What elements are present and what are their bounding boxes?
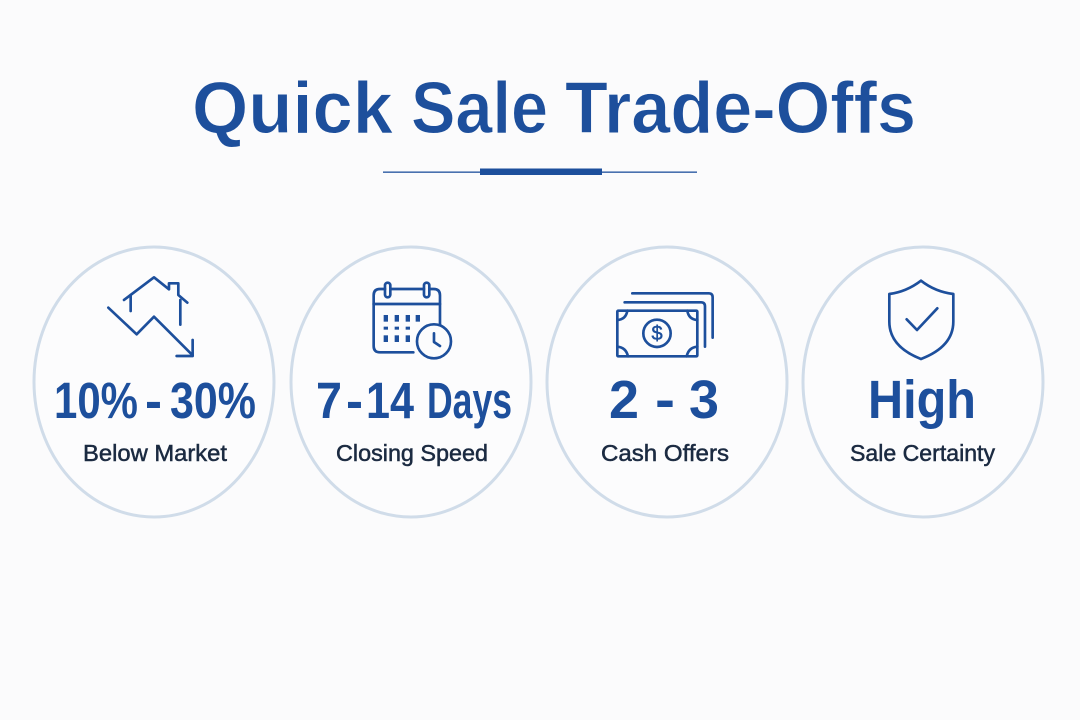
label: Sale Certainty [850, 440, 995, 466]
value: High [868, 370, 976, 430]
value: - [655, 370, 675, 430]
value [54, 372, 256, 429]
label: Closing Speed [336, 440, 488, 466]
panel: sale certainty [803, 247, 1043, 517]
value: 14 [366, 372, 415, 429]
panel: below market [34, 247, 274, 517]
title: Sale [411, 68, 548, 149]
icon: shield with check [889, 281, 953, 359]
value: Days [427, 372, 512, 429]
value: 7 [316, 372, 342, 429]
value: 10% [54, 372, 138, 429]
value: - [145, 372, 162, 429]
panel: closing speed [291, 247, 531, 517]
icon: stack of banknotes [617, 293, 713, 356]
icon: house with falling arrow [108, 277, 193, 356]
label: Cash Offers [601, 440, 729, 466]
value [609, 370, 719, 430]
icon: dollar sign: $ [651, 323, 663, 345]
icon: calendar with clock [374, 283, 451, 358]
value: 30% [170, 372, 256, 429]
value [316, 372, 512, 429]
label: Below Market [83, 440, 228, 466]
circle outline [291, 247, 531, 517]
title [192, 68, 916, 149]
circle outline [803, 247, 1043, 517]
title: Trade-Offs [565, 68, 916, 149]
circle outline [34, 247, 274, 517]
title: Quick [192, 68, 393, 149]
circle outline [547, 247, 787, 517]
value: 2 [609, 370, 639, 430]
title divider [383, 168, 697, 175]
value: - [346, 372, 363, 429]
panel: cash offers [547, 247, 787, 517]
value: 3 [689, 370, 719, 430]
